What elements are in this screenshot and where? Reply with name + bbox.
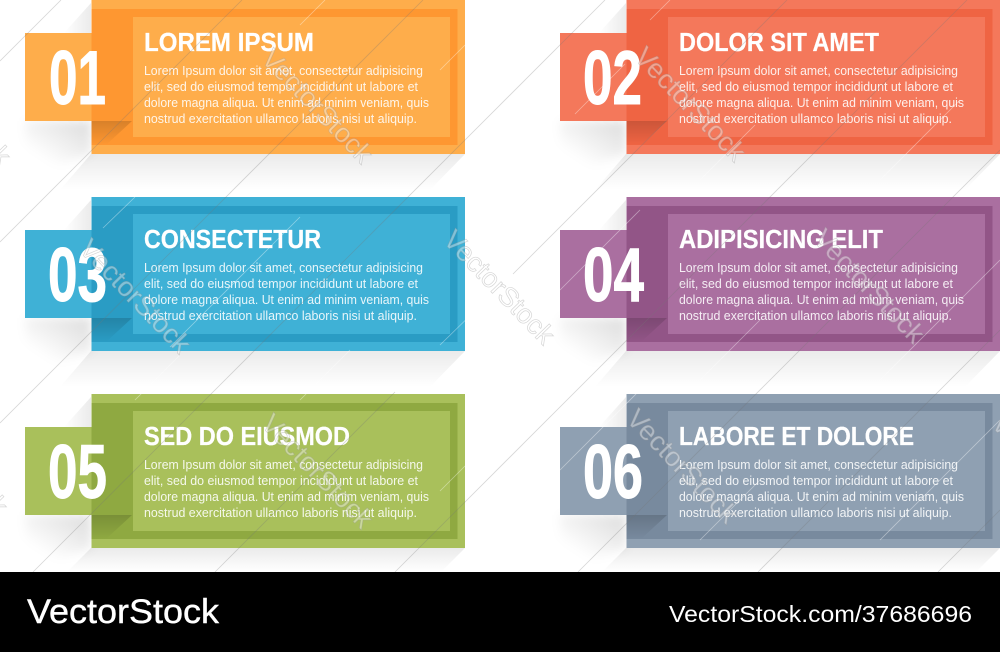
body text: elit, sed do eiusmod tempor incididunt ut labore et: [679, 474, 953, 488]
watermark: VectorStock diagonal text: [0, 41, 1000, 535]
heading: LABORE ET DOLORE: [679, 423, 914, 451]
body text: [144, 64, 429, 126]
body text: dolore magna aliqua. Ut enim ad minim veniam, quis: [144, 293, 429, 307]
body text: Lorem Ipsum dolor sit amet, consectetur adipisicing: [144, 64, 423, 78]
body text: nostrud exercitation ullamco laboris nisi ut aliquip.: [144, 309, 417, 323]
body text: nostrud exercitation ullamco laboris nisi ut aliquip.: [144, 112, 417, 126]
number 04: 04: [583, 233, 644, 318]
body text: [679, 458, 964, 520]
panel 06: slate: [560, 394, 1000, 572]
body text: Lorem Ipsum dolor sit amet, consectetur adipisicing: [679, 64, 958, 78]
body text: nostrud exercitation ullamco laboris nisi ut aliquip.: [679, 506, 952, 520]
body text: dolore magna aliqua. Ut enim ad minim veniam, quis: [144, 96, 429, 110]
panel 04: purple: [560, 197, 1000, 387]
body text: elit, sed do eiusmod tempor incididunt ut labore et: [144, 80, 418, 94]
watermark: VectorStock diagonal text: VectorStock: [74, 233, 197, 360]
body text: dolore magna aliqua. Ut enim ad minim veniam, quis: [679, 96, 964, 110]
body text: elit, sed do eiusmod tempor incididunt ut labore et: [679, 80, 953, 94]
body text: Lorem Ipsum dolor sit amet, consectetur adipisicing: [679, 261, 958, 275]
body text: elit, sed do eiusmod tempor incididunt ut labore et: [144, 277, 418, 291]
number 01: 01: [49, 36, 106, 121]
body text: Lorem Ipsum dolor sit amet, consectetur adipisicing: [679, 458, 958, 472]
footer logo: VectorStock: [27, 593, 220, 631]
body text: nostrud exercitation ullamco laboris nisi ut aliquip.: [679, 309, 952, 323]
body text: [144, 261, 429, 323]
footer image id: VectorStock.com/37686696: [669, 601, 972, 627]
panel 03: blue: [25, 197, 465, 387]
number 06: 06: [583, 430, 643, 515]
number 02: 02: [583, 36, 642, 121]
heading: SED DO EIUSMOD: [144, 423, 350, 451]
watermark: VectorStock diagonal text: VectorStock: [256, 43, 379, 170]
heading: LOREM IPSUM: [144, 29, 314, 57]
body text: elit, sed do eiusmod tempor incididunt ut labore et: [144, 474, 418, 488]
body text: Lorem Ipsum dolor sit amet, consectetur adipisicing: [144, 458, 423, 472]
footer bar: [0, 572, 1000, 652]
number 05: 05: [48, 430, 107, 515]
watermark: VectorStock diagonal text: VectorStock: [256, 408, 379, 535]
heading: DOLOR SIT AMET: [679, 29, 879, 57]
watermark: VectorStock diagonal text: VectorStock: [621, 403, 744, 530]
body text: [144, 458, 429, 520]
body text: dolore magna aliqua. Ut enim ad minim veniam, quis: [679, 490, 964, 504]
panel 01: orange: [25, 0, 465, 190]
body text: nostrud exercitation ullamco laboris nisi ut aliquip.: [144, 506, 417, 520]
body text: Lorem Ipsum dolor sit amet, consectetur adipisicing: [144, 261, 423, 275]
watermark: VectorStock diagonal text: VectorStock: [438, 224, 561, 351]
body text: nostrud exercitation ullamco laboris nisi ut aliquip.: [679, 112, 952, 126]
body text: [679, 64, 964, 126]
body text: [679, 261, 964, 323]
heading: ADIPISICING ELIT: [679, 226, 883, 254]
heading: CONSECTETUR: [144, 226, 321, 254]
panel 05: green: [25, 394, 465, 572]
watermark: VectorStock diagonal text: VectorStock: [808, 223, 931, 350]
panel 02: red: [560, 0, 1000, 190]
number 03: 03: [48, 233, 107, 318]
watermark: VectorStock diagonal text: VectorStock: [629, 41, 752, 168]
body text: dolore magna aliqua. Ut enim ad minim veniam, quis: [679, 293, 964, 307]
body text: dolore magna aliqua. Ut enim ad minim veniam, quis: [144, 490, 429, 504]
body text: elit, sed do eiusmod tempor incididunt ut labore et: [679, 277, 953, 291]
